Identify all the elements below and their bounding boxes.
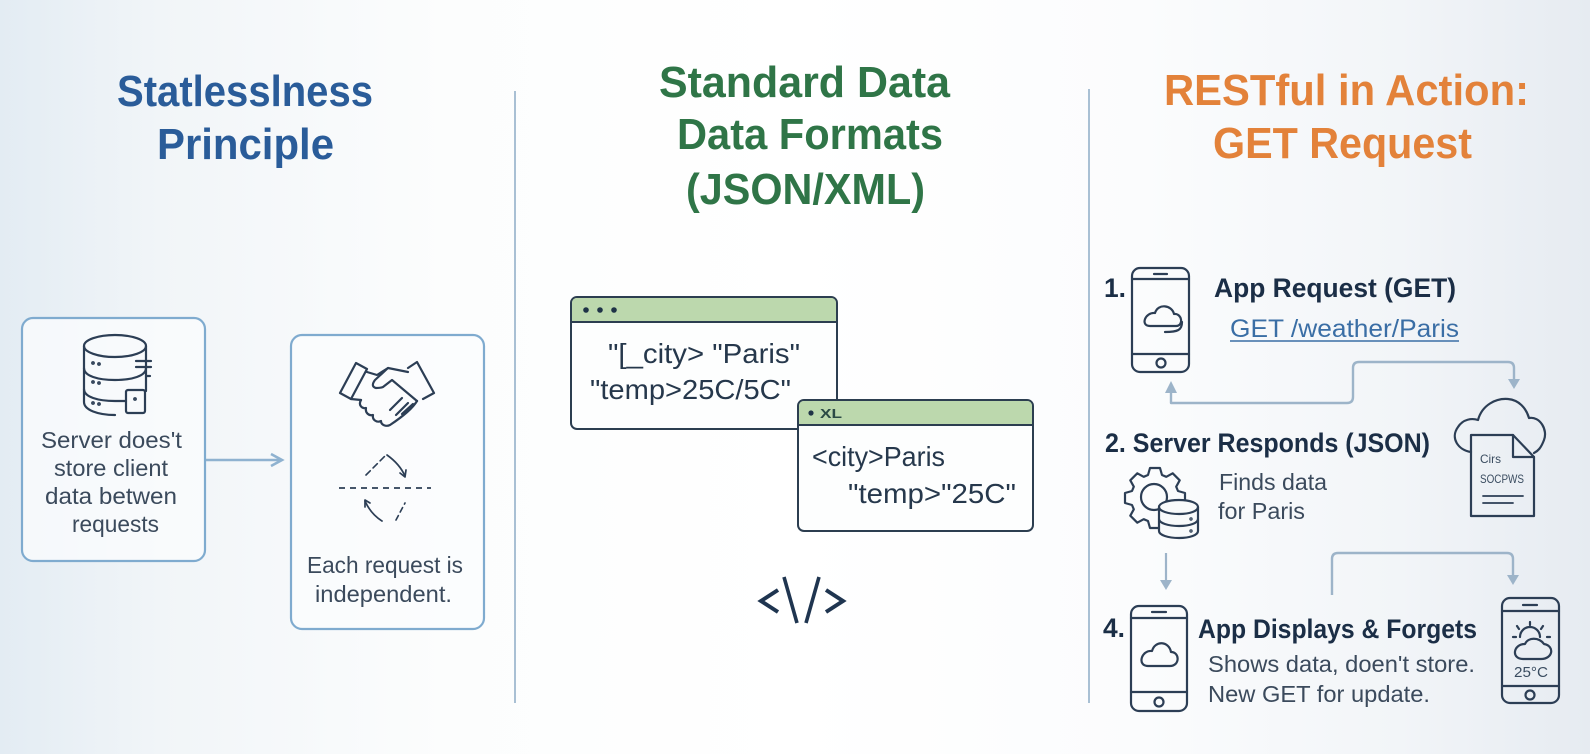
arrow: new GET connector bbox=[1332, 553, 1519, 595]
text: displays description: Shows data, doen't store. bbox=[1208, 651, 1475, 677]
icon: cloud document: Cirs bbox=[1480, 452, 1501, 466]
title: RESTful in Action bbox=[1164, 66, 1529, 168]
step 1: app request: App Request (GET) bbox=[1214, 273, 1456, 303]
step 2: server responds bbox=[1105, 399, 1545, 538]
title: Statelessness Principle: Principle bbox=[157, 120, 334, 169]
text: independent description: Each request is bbox=[307, 552, 463, 578]
text: independent description: independent. bbox=[315, 581, 452, 607]
text: server description: Server does't bbox=[41, 427, 183, 453]
text: finds data: for Paris bbox=[1218, 498, 1305, 524]
title: RESTful in Action: RESTful in Action: bbox=[1164, 66, 1529, 115]
arrow: request and response connector bbox=[1165, 362, 1520, 403]
text: JSON code: "temp>25C/5C" bbox=[590, 374, 791, 405]
icon: cloud document bbox=[1455, 399, 1545, 516]
text: displays description bbox=[1208, 651, 1475, 707]
icon: stateless cycle bbox=[339, 455, 431, 521]
icon: gear and database bbox=[1125, 468, 1198, 538]
text: finds data bbox=[1218, 469, 1327, 524]
text: XML code bbox=[812, 441, 1016, 509]
panel: server box bbox=[22, 318, 205, 561]
arrow: server to independent bbox=[206, 454, 282, 466]
icon: phone with weather bbox=[1502, 598, 1559, 703]
step 1: app request bbox=[1104, 268, 1459, 372]
icon: cloud document: SOCPWS bbox=[1480, 472, 1524, 486]
step 2: server responds: 2. Server Responds (JSON) bbox=[1105, 428, 1430, 458]
arrow: down to step 4 bbox=[1160, 553, 1172, 590]
icon: code symbol bbox=[761, 577, 843, 623]
text: independent description bbox=[307, 552, 463, 607]
step 4: app displays and forgets: App Displays & Forgets bbox=[1198, 614, 1477, 644]
step 4: app displays and forgets: 4. bbox=[1103, 613, 1125, 643]
text: JSON code bbox=[590, 338, 800, 405]
text: displays description: New GET for update. bbox=[1208, 681, 1430, 707]
title: RESTful in Action: GET Request bbox=[1213, 119, 1472, 168]
panel: XML window: XL bbox=[820, 406, 842, 421]
text: server description: requests bbox=[72, 511, 159, 537]
title: Statelessness Principle: Statlesslness bbox=[117, 67, 373, 116]
icon: server stack bbox=[84, 335, 151, 415]
title: Standard Data Formats bbox=[659, 58, 951, 214]
title: Standard Data Formats: Data Formats bbox=[677, 110, 943, 159]
title: Statelessness Principle bbox=[117, 67, 373, 169]
text: server description: data betwen bbox=[45, 483, 177, 509]
text: XML code: <city>Paris bbox=[812, 441, 945, 472]
icon: phone with cloud bbox=[1131, 606, 1187, 711]
text: JSON code: "[_city> "Paris" bbox=[608, 338, 800, 369]
panel: XML window bbox=[798, 400, 1033, 531]
panel: independent box bbox=[291, 335, 484, 629]
title: Standard Data Formats: (JSON/XML) bbox=[686, 165, 925, 214]
text: XML code: "temp>"25C" bbox=[848, 478, 1016, 509]
panel: JSON window bbox=[571, 297, 837, 429]
step 1: app request: 1. bbox=[1104, 273, 1126, 303]
step 4: app displays and forgets bbox=[1103, 598, 1559, 711]
link: GET path: GET /weather/Paris bbox=[1230, 315, 1459, 343]
text: server description: store client bbox=[54, 455, 169, 481]
icon: phone with weather: 25°C bbox=[1514, 664, 1548, 681]
text: server description bbox=[41, 427, 183, 537]
title: Standard Data Formats: Standard Data bbox=[659, 58, 951, 107]
text: finds data: Finds data bbox=[1219, 469, 1327, 495]
icon: handshake bbox=[340, 362, 434, 426]
icon: phone with cloud bbox=[1132, 268, 1189, 372]
